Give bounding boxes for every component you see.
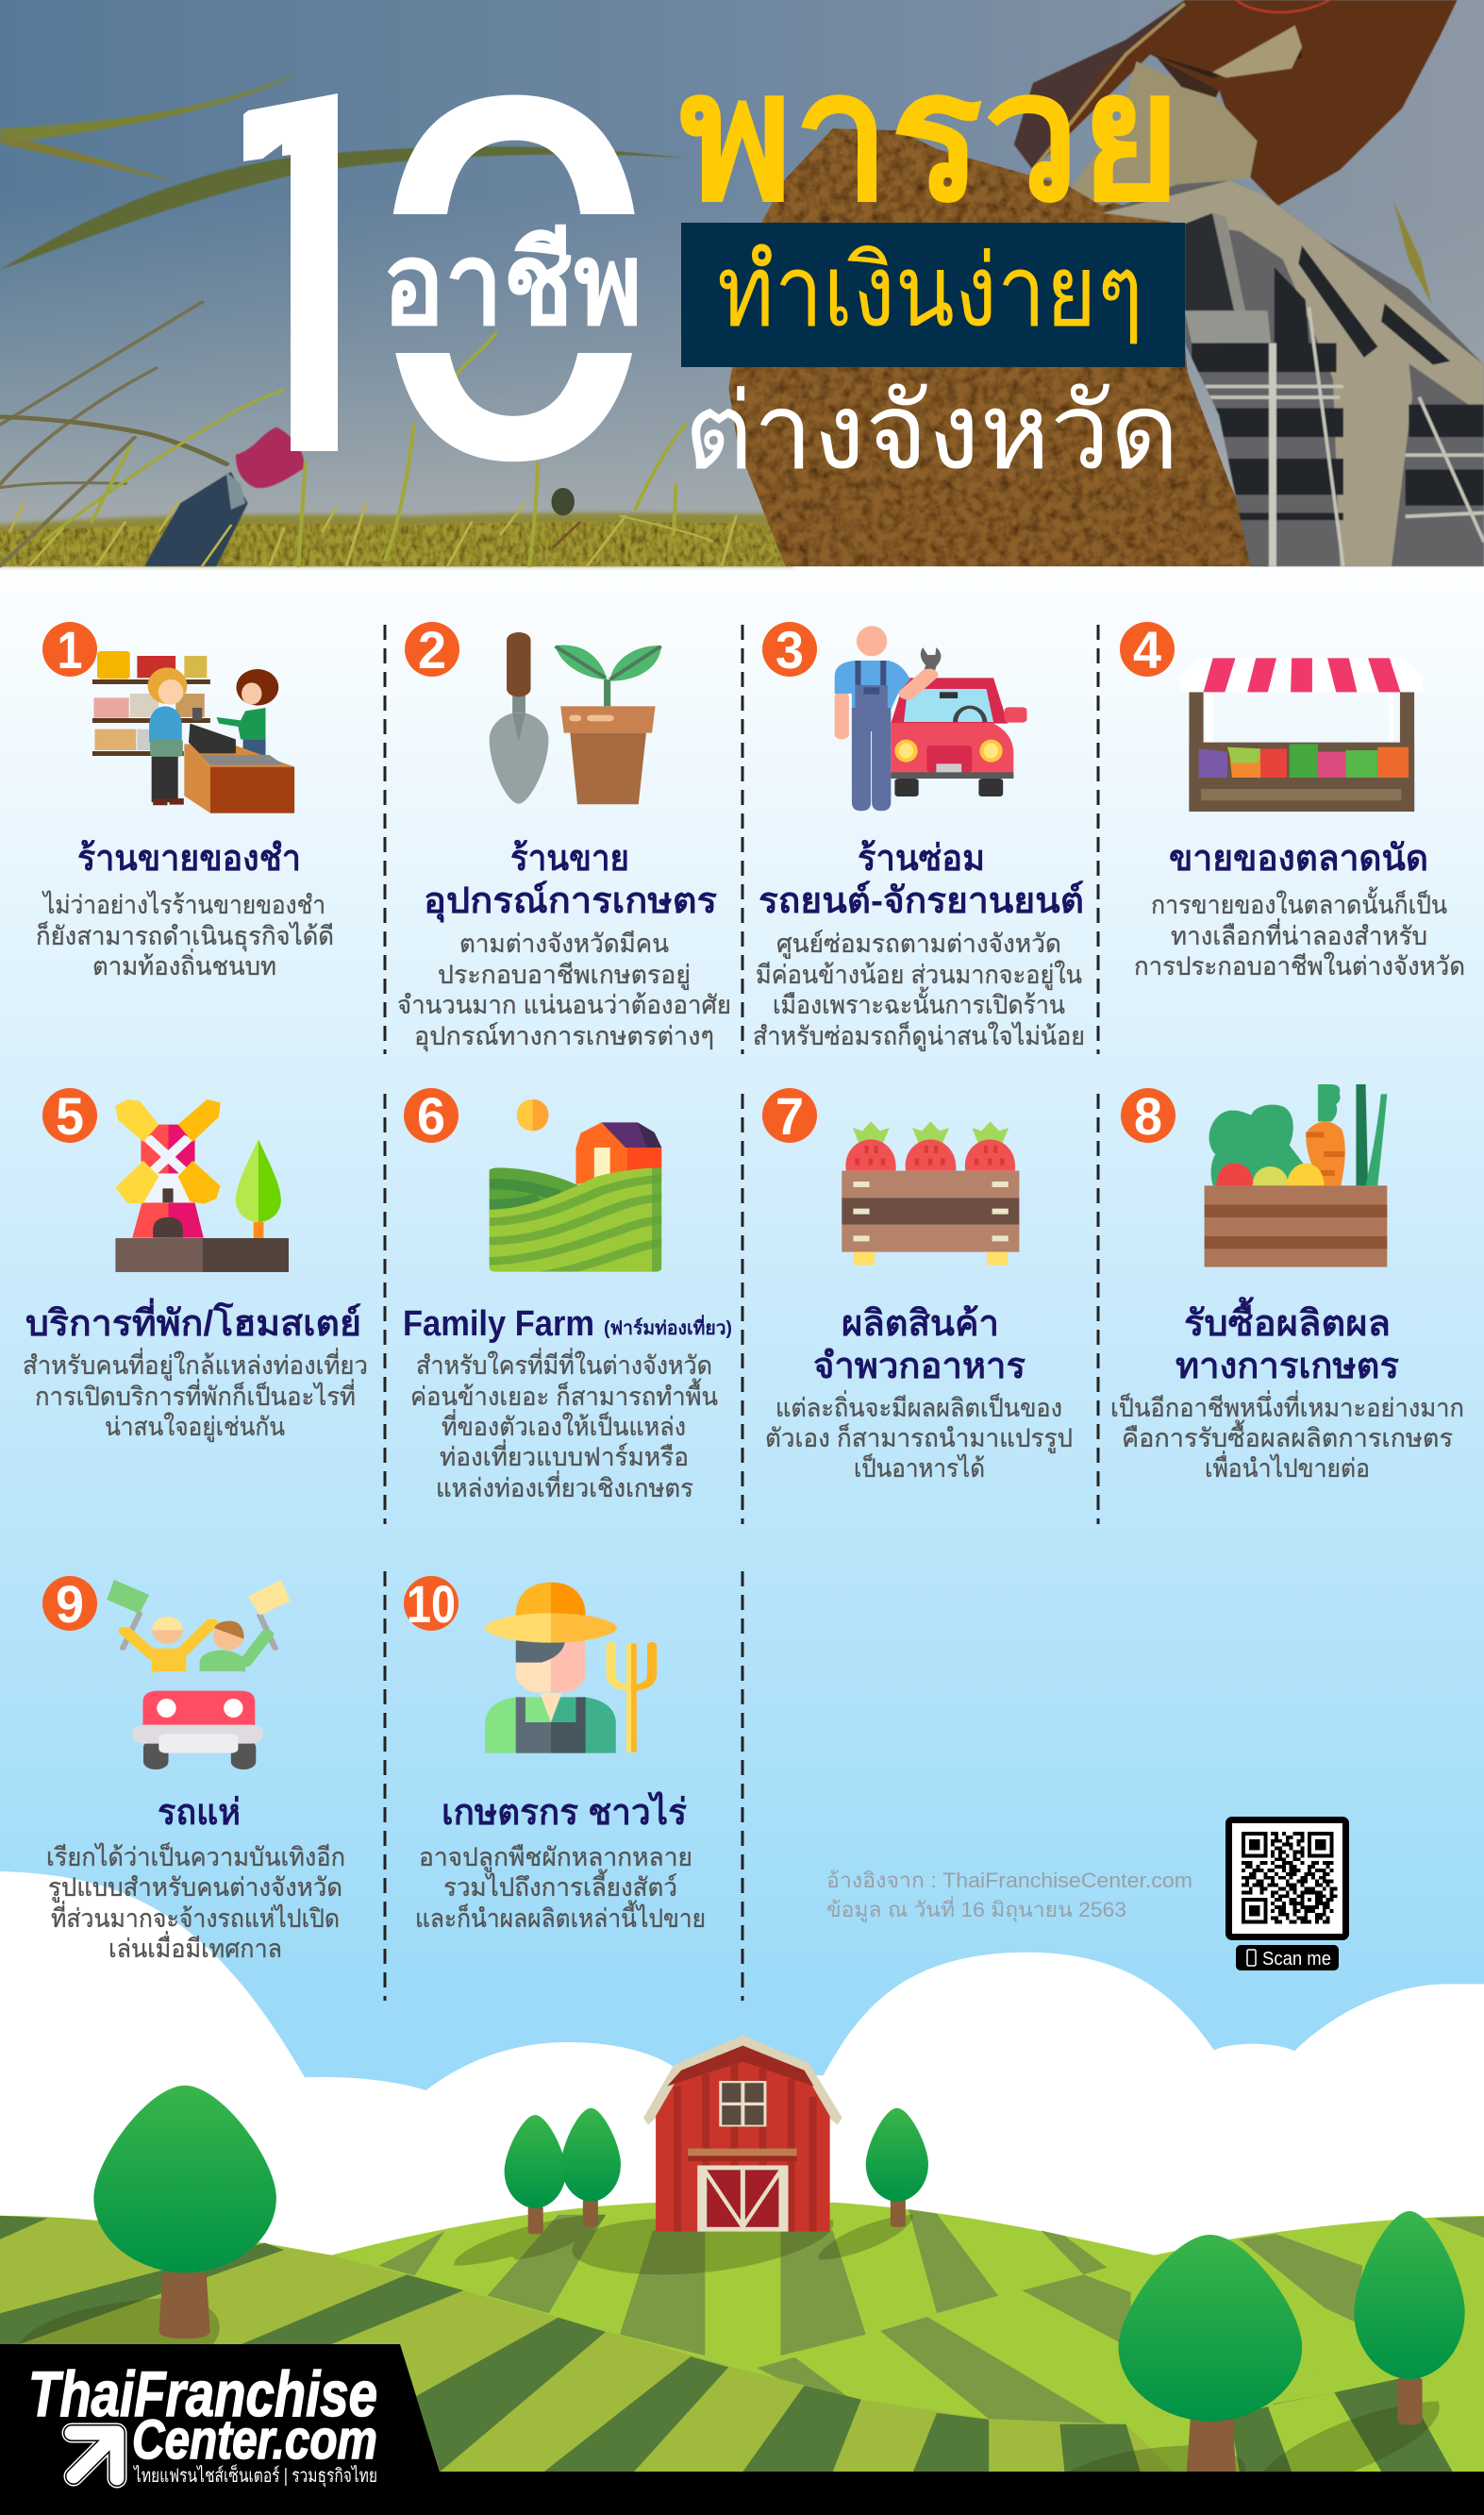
farmer carrying rice, right <box>1014 0 1484 571</box>
description: จำนวนมาก แน่นอนว่าต้องอาศัย <box>397 991 731 1019</box>
description: และก็นำผลผลิตเหล่านี้ไปขาย <box>415 1900 706 1933</box>
title: ผลิตสินค้า <box>842 1304 999 1344</box>
description <box>397 930 731 1052</box>
right hill stripes <box>757 2274 1334 2424</box>
title: เกษตรกร ชาวไร่ <box>442 1791 688 1833</box>
scan me label <box>1236 1945 1339 1970</box>
description: ประกอบอาชีพเกษตรอยู่ <box>438 961 691 990</box>
number badges: 6 <box>417 1086 445 1146</box>
icon: farmer with pitchfork <box>485 1583 652 1753</box>
item 4: ขายของตลาดนัด <box>1134 658 1465 981</box>
title: ขายของตลาดนัด <box>1169 839 1428 879</box>
title: อุปกรณ์การเกษตร <box>424 880 718 923</box>
number badges: 1 <box>57 620 83 679</box>
description: คือการรับซื้อผลผลิตการเกษตร <box>1122 1419 1453 1452</box>
description: เพื่อนำไปขายต่อ <box>1205 1450 1370 1483</box>
word: ทำเงินง่ายๆ: ทำเงินง่ายๆ <box>717 236 1143 347</box>
number badges: 7 <box>775 1086 804 1146</box>
item 7: ผลิตสินค้าจำพวกอาหาร <box>765 1121 1073 1483</box>
description: สำหรับคนที่อยู่ใกล้แหล่งท่องเที่ยว <box>23 1348 368 1381</box>
source note: ข้อมูล ณ วันที่ 16 มิถุนายน 2563 <box>826 1895 1126 1922</box>
title: รถยนต์-จักรยานยนต์ <box>759 880 1084 921</box>
item 8: รับซื้อผลิตผลทางการเกษตร <box>1110 1084 1464 1483</box>
item 2: ร้านขายอุปกรณ์การเกษตร <box>397 632 731 1052</box>
description: น่าสนใจอยู่เช่นกัน <box>105 1412 285 1442</box>
logo tagline: ไทยแฟรนไชส์เซ็นเตอร์ | รวมธุรกิจไทย <box>132 2463 377 2488</box>
scarf <box>1071 61 1258 206</box>
icon: vegetable crate <box>1205 1084 1387 1267</box>
logo band <box>0 2344 1484 2515</box>
dry leaf <box>1393 200 1431 303</box>
word: พารวย: พารวย <box>679 35 1181 238</box>
banner <box>681 223 1185 367</box>
icon: strawberry crate <box>842 1121 1019 1266</box>
description: การประกอบอาชีพในต่างจังหวัด <box>1134 951 1465 981</box>
description: แหล่งท่องเที่ยวเชิงเกษตร <box>436 1470 693 1502</box>
description: ตัวเอง ก็สามารถนำมาแปรรูป <box>765 1421 1073 1453</box>
description: ก็ยังสามารถดำเนินธุรกิจได้ดี <box>36 919 334 952</box>
hat <box>1014 0 1457 206</box>
logo text: Center.com: Center.com <box>132 2409 377 2471</box>
dashed dividers <box>385 625 1098 2001</box>
icon: parade car <box>107 1580 291 1769</box>
source note <box>826 1869 1192 1922</box>
page background <box>0 566 1484 2406</box>
description: เรียกได้ว่าเป็นความบันเทิงอีก <box>46 1840 345 1871</box>
title: บริการที่พัก/โฮมสเตย์ <box>25 1298 361 1344</box>
description <box>1134 886 1465 981</box>
number badges: 4 <box>1133 620 1161 679</box>
hero photo background <box>0 0 1484 571</box>
description: ตามต่างจังหวัดมีคน <box>459 930 669 958</box>
QR code <box>1226 1817 1349 1970</box>
item 1: ร้านขายของชำ <box>36 651 334 981</box>
number badges: 2 <box>418 620 446 679</box>
description <box>410 1348 718 1502</box>
description <box>36 891 334 981</box>
description: เป็นอาหารได้ <box>854 1451 985 1483</box>
description <box>765 1390 1073 1483</box>
clouds <box>0 1871 1484 2280</box>
description: ไม่ว่าอย่างไรร้านขายของชำ <box>42 891 325 919</box>
number badges: 9 <box>56 1574 84 1634</box>
hills <box>0 2203 1484 2472</box>
title <box>759 839 1084 921</box>
icon: grocery shop <box>92 651 294 813</box>
item 6: Family Farm <box>403 1099 732 1502</box>
description: การขายของในตลาดนั้นก็เป็น <box>1151 886 1447 919</box>
icon: windmill and tree <box>115 1099 289 1272</box>
description <box>23 1348 368 1442</box>
title <box>813 1304 1026 1386</box>
item 10: เกษตรกร ชาวไร่ <box>415 1583 706 1933</box>
title: ทางการเกษตร <box>1176 1347 1400 1386</box>
description: ตามท้องถิ่นชนบท <box>92 948 276 981</box>
description: ที่ส่วนมากจะจ้างรถแห่ไปเปิด <box>51 1901 340 1933</box>
number badges: 5 <box>56 1086 84 1146</box>
front left hill <box>0 2216 1174 2472</box>
icon: mechanic and car <box>835 626 1026 811</box>
description <box>415 1843 706 1933</box>
description: ทางเลือกที่น่าลองสำหรับ <box>1171 918 1427 950</box>
icon: market stall <box>1180 658 1423 812</box>
description: การเปิดบริการที่พักก็เป็นอะไรที่ <box>35 1379 356 1411</box>
title <box>424 839 718 923</box>
description: อาจปลูกพืชผักหลากหลาย <box>419 1843 692 1872</box>
logo arrow <box>72 2433 117 2478</box>
word: อาชีพ: อาชีพ <box>382 220 642 348</box>
description: อุปกรณ์ทางการเกษตรต่างๆ <box>414 1021 714 1052</box>
title: ร้านขายของชำ <box>77 839 301 879</box>
icon: farm fields and barn <box>489 1099 662 1272</box>
title note: (ฟาร์มท่องเที่ยว) <box>604 1314 732 1339</box>
item 3: ร้านซ่อมรถยนต์-จักรยานยนต์ <box>753 626 1085 1051</box>
logo text: ThaiFranchise: ThaiFranchise <box>28 2358 377 2430</box>
title: รถแห่ <box>158 1793 241 1833</box>
landscape: clouds and hills <box>0 1871 1484 2472</box>
description: เป็นอีกอาชีพหนึ่งที่เหมาะอย่างมาก <box>1110 1390 1464 1422</box>
title: ร้านซ่อม <box>858 839 985 879</box>
description: เล่นเมื่อมีเทศกาล <box>108 1931 282 1963</box>
description: สำหรับใครที่มีที่ในต่างจังหวัด <box>416 1348 712 1380</box>
field and farmer, left <box>0 302 794 566</box>
description: มีค่อนข้างน้อย ส่วนมากจะอยู่ใน <box>756 960 1082 990</box>
description: แต่ละถิ่นจะมีผลผลิตเป็นของ <box>775 1390 1062 1422</box>
barn <box>643 2035 842 2232</box>
description: ศูนย์ซ่อมรถตามต่างจังหวัด <box>776 929 1061 959</box>
title: Family Farm <box>403 1304 594 1344</box>
description <box>1110 1390 1464 1483</box>
scan me label: Scan me <box>1262 1949 1331 1970</box>
description: ท่องเที่ยวแบบฟาร์มหรือ <box>440 1439 689 1471</box>
source note: อ้างอิงจาก : ThaiFranchiseCenter.com <box>826 1869 1192 1892</box>
rice sheaf <box>728 128 1268 566</box>
numeral zero: 0 <box>374 0 655 560</box>
number badges: 3 <box>775 620 804 679</box>
title: 10 อาชีพ พารวย ทำเงินง่ายๆ ต่างจังหวัด <box>179 0 1185 565</box>
icon: trowel and plant pot <box>490 632 661 804</box>
title: จำพวกอาหาร <box>813 1347 1026 1386</box>
center hill stripes <box>378 2209 1108 2356</box>
description: ที่ของตัวเองให้เป็นแหล่ง <box>442 1409 686 1441</box>
description: ค่อนข้างเยอะ ก็สามารถทำพื้น <box>410 1378 718 1411</box>
title: รับซื้อผลิตผล <box>1184 1297 1391 1344</box>
number badges: 10 <box>407 1574 456 1634</box>
shadows <box>19 2215 1440 2472</box>
word: ต่างจังหวัด: ต่างจังหวัด <box>684 373 1179 491</box>
title <box>1176 1297 1400 1386</box>
description <box>753 929 1085 1051</box>
number badges <box>42 620 1176 1634</box>
description: สำหรับซ่อมรถก็ดูน่าสนใจไม่น้อย <box>753 1019 1085 1051</box>
item 5: บริการที่พัก/โฮมสเตย์ <box>23 1099 368 1442</box>
title: ร้านขาย <box>510 839 629 879</box>
description: รูปแบบสำหรับคนต่างจังหวัด <box>48 1873 342 1903</box>
plaid shirt <box>1098 177 1484 571</box>
description <box>46 1840 345 1963</box>
trees <box>159 2199 1423 2472</box>
description: รวมไปถึงการเลี้ยงสัตว์ <box>443 1869 677 1902</box>
description: เมืองเพราะฉะนั้นการเปิดร้าน <box>773 986 1065 1019</box>
item 9: รถแห่ <box>46 1580 345 1963</box>
number badges: 8 <box>1134 1086 1162 1146</box>
